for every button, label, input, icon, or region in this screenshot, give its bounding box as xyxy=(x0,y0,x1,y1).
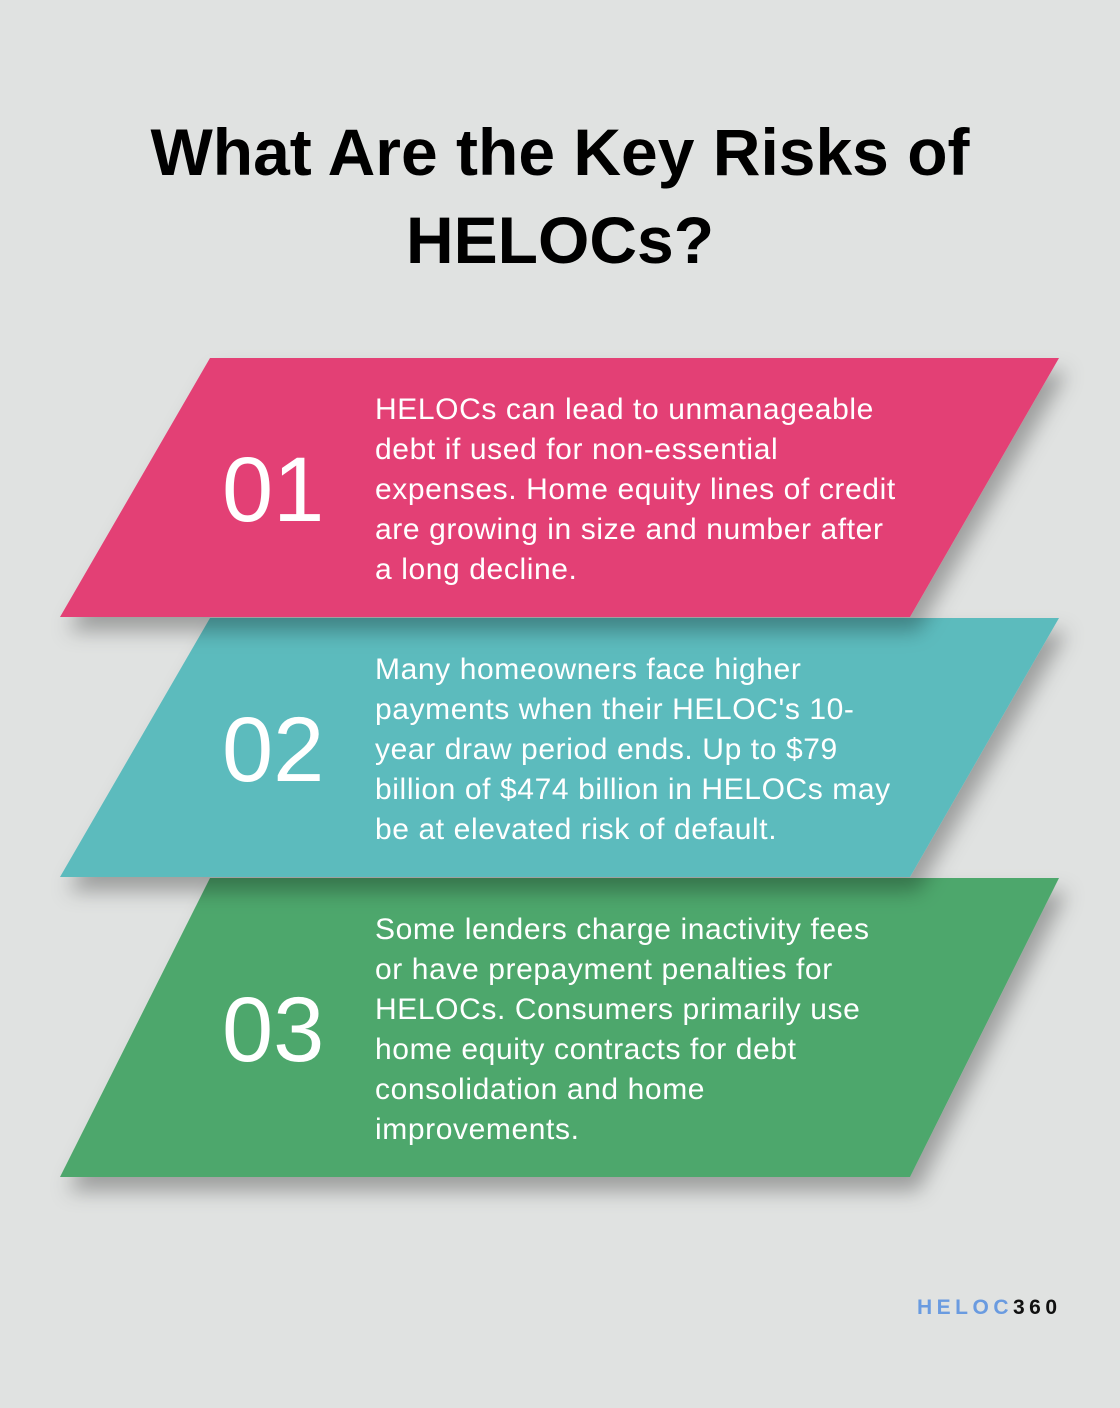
logo: HELOC360 xyxy=(917,1296,1062,1319)
text 03: consolidation and home xyxy=(375,1073,705,1106)
text 02: be at elevated risk of default. xyxy=(375,813,777,846)
text 02: Many homeowners face higher xyxy=(375,653,801,686)
text 01: HELOCs can lead to unmanageable xyxy=(375,393,874,426)
number 02: 02 xyxy=(222,699,324,801)
text 02: payments when their HELOC's 10- xyxy=(375,693,855,726)
number 01: 01 xyxy=(222,439,324,541)
text 01 xyxy=(375,393,896,586)
panel: 01 xyxy=(60,358,1059,617)
panel: 03 xyxy=(60,878,1059,1177)
number 03: 03 xyxy=(222,979,324,1081)
text 01: are growing in size and number after xyxy=(375,513,884,546)
text 02: year draw period ends. Up to $79 xyxy=(375,733,838,766)
text 03: Some lenders charge inactivity fees xyxy=(375,913,870,946)
text 01: debt if used for non-essential xyxy=(375,433,778,466)
text 02: billion of $474 billion in HELOCs may xyxy=(375,773,891,806)
text 03: home equity contracts for debt xyxy=(375,1033,797,1066)
text 03: improvements. xyxy=(375,1113,580,1146)
text 03: HELOCs. Consumers primarily use xyxy=(375,993,860,1026)
title xyxy=(150,115,970,277)
text 03 xyxy=(375,913,870,1146)
text 01: a long decline. xyxy=(375,553,577,586)
title: HELOCs? xyxy=(406,203,714,277)
text 01: expenses. Home equity lines of credit xyxy=(375,473,896,506)
panel: 02 xyxy=(60,618,1059,877)
text 02 xyxy=(375,653,891,846)
text 03: or have prepayment penalties for xyxy=(375,953,833,986)
title: What Are the Key Risks of xyxy=(150,115,970,189)
